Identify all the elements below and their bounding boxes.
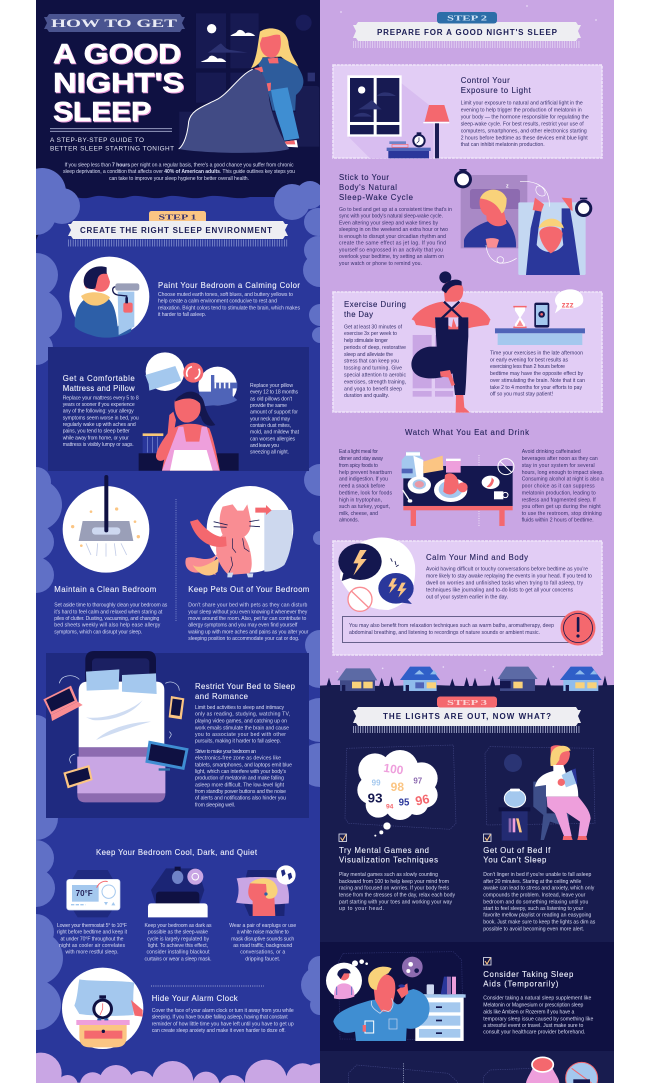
body: sleeping. If you have trouble falling asleep, having that constant xyxy=(152,1015,288,1021)
left body xyxy=(344,324,406,399)
skyline with houses xyxy=(320,666,614,691)
step 1 tag xyxy=(149,211,206,223)
right body: Avoid drinking caffeinated xyxy=(522,449,581,455)
title: Stick to Your xyxy=(339,173,389,182)
illustration: counting thought cloud: 99 xyxy=(372,779,381,788)
title xyxy=(339,846,438,864)
section: clean bedroom xyxy=(54,475,168,635)
step 2 heading: PREPARE FOR A GOOD NIGHT'S SLEEP xyxy=(377,28,558,37)
text: thermostat: Lower your thermostat 5° to 10°F xyxy=(57,923,127,929)
title xyxy=(195,682,296,701)
icon: checkbox xyxy=(484,834,491,842)
text: earplugs: dripping faucet. xyxy=(245,956,280,962)
body: Even altering your sleep and wake times by xyxy=(339,220,438,226)
body: Limit bed activities to sleep and intimacy xyxy=(195,705,284,711)
body: computers, smartphones, and other electronics starting xyxy=(461,128,587,134)
icon: mop xyxy=(63,475,149,573)
right body: bedtime may have the opposite effect by xyxy=(490,371,583,377)
left body: mattress is visibly lumpy or sags. xyxy=(63,442,134,448)
section: pets xyxy=(185,486,309,642)
intro text: If you sleep less than 7 hours per night on a regular basis, there's a good chance you suffer from chronic xyxy=(64,162,294,168)
body: Choose muted earth tones, soft blues, and buttery yellows to xyxy=(158,292,293,298)
body: bed sheets weekly will also help ease allergy xyxy=(54,623,161,629)
body xyxy=(152,1008,294,1034)
icon: red clock xyxy=(566,1062,598,1083)
callout box xyxy=(342,616,568,642)
hero illustration: woman pulling blanket xyxy=(179,13,319,153)
right body: you often get up during the night xyxy=(522,504,601,510)
body: it harder to fall asleep. xyxy=(158,312,206,318)
right body: contain dust mites, xyxy=(250,423,291,429)
main title: A GOOD xyxy=(53,38,181,69)
body: only as reading, studying, watching TV, xyxy=(195,712,290,718)
callout box: You may also benefit from relaxation techniques such as warm baths, aromatherapy, deep xyxy=(349,623,554,629)
body: electronics-free zone as devices like xyxy=(195,756,281,762)
body: help create a calm environment conducive to rest and xyxy=(158,299,277,305)
body: sleep-wake cycle. For best results, restrict your use of xyxy=(461,122,584,128)
left body: exercise 3x per week to xyxy=(344,331,397,337)
body: aids like Ambien or Rozerem if you have a xyxy=(483,1009,574,1015)
right body: to use the restroom, stop drinking xyxy=(522,511,602,517)
illustration: counting thought cloud: 100 xyxy=(383,761,405,777)
body: more likely to stay awake replaying the events in your head. If you tend to xyxy=(426,573,592,579)
panel: restrict your bed xyxy=(43,651,309,818)
illustration: window and lamp xyxy=(347,75,449,158)
right body: can worsen allergies xyxy=(250,436,295,442)
left body: high in tryptophan, xyxy=(339,497,382,503)
left body: years or sooner if you experience xyxy=(63,402,135,408)
step 1 heading: CREATE THE RIGHT SLEEP ENVIRONMENT xyxy=(80,226,272,235)
body xyxy=(54,603,168,635)
subtitle: A STEP-BY-STEP GUIDE TO xyxy=(50,137,144,144)
icon: thermostat: 70°F xyxy=(76,889,93,898)
body xyxy=(483,872,596,932)
left body: pains, you tend to sleep better xyxy=(63,429,130,435)
text: earplugs: mask disruptive sounds such xyxy=(231,936,294,942)
illustration: sleeper and waking xyxy=(454,169,592,275)
left body: such as turkey, yogurt, xyxy=(339,504,390,510)
left body: regularly wake up with aches and xyxy=(63,422,136,428)
body: up to your head. xyxy=(339,906,384,912)
icon: man painting xyxy=(69,257,149,338)
text: dark bedroom: consider installing blackout xyxy=(146,950,210,956)
right body: exercising less than 2 hours before xyxy=(490,364,565,370)
text: thermostat: right before bedtime and keep it xyxy=(57,930,128,936)
right column: lilac background xyxy=(320,0,614,690)
section: hide alarm clock xyxy=(62,968,294,1049)
illustration: counting thought cloud xyxy=(345,745,456,837)
body: is enough to disrupt your circadian rhythm and xyxy=(339,234,446,240)
step 3 heading: THE LIGHTS ARE OUT, NOW WHAT? xyxy=(383,712,551,721)
heading: Keep Your Bedroom Cool, Dark, and Quiet xyxy=(96,848,258,857)
right body: your neck and may xyxy=(250,416,290,422)
main title: SLEEP xyxy=(53,96,151,127)
callout box: abdominal breathing, and listening to recordings of nature sounds or ambient music. xyxy=(349,630,540,636)
body: symptoms, which can disrupt your sleep. xyxy=(54,629,142,635)
right body: stay in your system for several xyxy=(522,463,595,469)
illustration: food table xyxy=(402,452,514,527)
body: can create sleep anxiety and make it even harder to doze off. xyxy=(152,1028,286,1034)
body: move around the room. Also, pet fur can contribute to xyxy=(188,616,306,622)
right body: hours, long enough to impact sleep. xyxy=(522,470,604,476)
subtitle: BETTER SLEEP STARTING TONIGHT xyxy=(50,146,174,153)
text: dark bedroom: light. To achieve this effect, xyxy=(148,943,208,949)
right body: fluids within 2 hours of bedtime. xyxy=(522,518,594,524)
title xyxy=(344,300,406,319)
body xyxy=(195,705,292,808)
section: paint your bedroom xyxy=(69,257,300,338)
left body: special attention to aerobic xyxy=(344,372,406,378)
title: Keep Pets Out of Your Bedroom xyxy=(188,585,309,594)
body: Consider taking a natural sleep supplement like xyxy=(483,995,591,1001)
illustration: counting thought cloud: 93 xyxy=(368,791,382,806)
text: earplugs: Wear a pair of earplugs or use xyxy=(229,923,296,929)
body: your sleep without you even knowing it whenever they xyxy=(188,609,308,615)
body xyxy=(339,207,452,267)
title: and Romance xyxy=(195,692,248,701)
woman xyxy=(179,28,303,153)
body: work emails stimulate the brain and cause xyxy=(195,725,289,731)
title xyxy=(63,374,135,393)
body: favorite mellow playlist or reading an easygoing xyxy=(483,913,591,919)
right body: amount of support for xyxy=(250,410,298,416)
body: pursuits, making it harder to fall asleep. xyxy=(195,739,281,745)
body: racing and focused on worries. If your body feels xyxy=(339,886,449,892)
title: Visualization Techniques xyxy=(339,856,438,864)
body: Cover the face of your alarm clock or turn it away from you while xyxy=(152,1008,294,1014)
body xyxy=(483,995,593,1036)
body: your watch or phone to remind you. xyxy=(339,261,422,267)
left body: sleep and alleviate the xyxy=(344,352,393,358)
body: playing video games, and catching up on xyxy=(195,719,287,725)
left body: and indigestion. If you xyxy=(339,477,388,483)
body: after 20 minutes. Staring at the ceiling while xyxy=(483,879,581,885)
left body: and yoga to benefit sleep xyxy=(344,386,402,392)
body xyxy=(426,566,592,600)
body xyxy=(339,872,455,912)
title: Get Out of Bed If xyxy=(483,846,551,855)
text: dark bedroom: Keep your bedroom as dark as xyxy=(144,923,212,929)
icon: earplugs xyxy=(236,865,296,916)
left body: while away from home, or your xyxy=(63,435,129,441)
left body: dinner and stay away xyxy=(339,456,383,462)
body: Set aside time to thoroughly clean your bedroom as xyxy=(54,603,168,609)
step 2 tag: STEP 2 xyxy=(447,14,488,22)
body: waking up with more aches and pains as you alter your xyxy=(188,629,309,635)
text: dark bedroom xyxy=(144,923,212,962)
subtitle xyxy=(50,129,174,153)
step 2 heading xyxy=(353,12,581,44)
text: thermostat: with more restful sleep. xyxy=(66,950,118,956)
right body: sneezing all night. xyxy=(250,450,289,456)
blue house xyxy=(400,667,440,691)
illustration: counting thought cloud: 94 xyxy=(386,804,394,811)
right body: or early evening for best results as xyxy=(490,357,568,363)
title: Exercise During xyxy=(344,300,406,309)
intro text: sleep deprivation, a condition that affects over 40% of American adults. This guide outlines key steps you xyxy=(63,169,295,175)
body: reminder of how little time you have left until you have to get up xyxy=(152,1021,294,1027)
body: overlook your bedtime, try setting an alarm on xyxy=(339,254,444,260)
step 3 heading xyxy=(353,696,581,730)
step 3 tag xyxy=(437,696,497,708)
title: Maintain a Clean Bedroom xyxy=(54,585,156,594)
title: Calm Your Mind and Body xyxy=(426,553,528,562)
body: sleeping in on the weekend an extra hour or two xyxy=(339,227,448,233)
body: sync with your body's natural sleep-wake cycle. xyxy=(339,214,443,220)
panel: mattress and pillow xyxy=(48,347,309,471)
left body: duration and quality. xyxy=(344,393,389,399)
body: part starting with your toes and working your way xyxy=(339,899,452,905)
panel: calm your mind xyxy=(333,538,602,655)
body: out of your system earlier in the day. xyxy=(426,594,508,600)
title banner: how to get: HOW TO GET xyxy=(51,18,178,30)
left body: periods of deep, restorative xyxy=(344,345,406,351)
step 1 heading xyxy=(68,211,288,243)
blue house xyxy=(560,667,602,691)
body: of alerts and notifications also hinder you xyxy=(195,796,286,802)
title: the Day xyxy=(344,310,373,319)
right body: beverages after noon as they can xyxy=(522,456,598,462)
text: earplugs: a white noise machine to xyxy=(237,930,289,936)
title xyxy=(483,970,574,988)
body: relaxation. Bright colors tend to stimulate the brain, which makes xyxy=(158,305,300,311)
icon: cat at door xyxy=(185,486,293,577)
text: earplugs xyxy=(229,923,296,962)
right column: navy background xyxy=(320,688,614,1083)
body xyxy=(461,100,589,148)
body xyxy=(158,292,300,318)
title: Paint Your Bedroom a Calming Color xyxy=(158,281,300,290)
illustration: shelf, hourglass, phone xyxy=(413,289,585,397)
body: bedroom and do something relaxing until you xyxy=(483,899,588,905)
icon: checkbox xyxy=(339,834,346,842)
body: asleep more difficult. The low-level light xyxy=(195,782,285,788)
left body: help stimulate longer xyxy=(344,338,388,344)
section: stick to your cycle xyxy=(339,169,592,275)
panel: control your exposure xyxy=(333,65,602,158)
title: Mattress and Pillow xyxy=(63,384,135,393)
body: dwell on worries and unfinished tasks when trying to fall asleep, try xyxy=(426,580,583,586)
title: Aids (Temporarily) xyxy=(483,980,559,988)
body xyxy=(188,603,309,642)
left body: Get at least 30 minutes of xyxy=(344,324,403,330)
body: tense from the stresses of the day, relax each body xyxy=(339,892,455,898)
left body: stress that can keep you xyxy=(344,359,399,365)
body: allergy symptoms and you may even find yourself xyxy=(188,623,298,629)
icon: dark bedroom xyxy=(148,867,208,917)
body: you to associate your bed with other xyxy=(195,732,286,738)
right body: take 2 to 4 months for your efforts to pay xyxy=(490,385,582,391)
text: dark bedroom: cycle is largely regulated by xyxy=(147,936,209,942)
right body: as old pillows don't xyxy=(250,396,293,402)
left body xyxy=(63,395,139,448)
body: from standby power buttons and the noise xyxy=(195,789,286,795)
right body: and leave you xyxy=(250,443,279,449)
body: from sleeping well. xyxy=(195,802,235,808)
left body: from spicy foods to xyxy=(339,463,378,469)
right body xyxy=(490,350,585,398)
body: evening to help trigger the production of melatonin in xyxy=(461,108,582,114)
window xyxy=(196,13,259,103)
body: backward from 100 to help keep your mind from xyxy=(339,879,449,885)
right body: Time your exercises in the late afternoon xyxy=(490,350,583,356)
body: create the same effect as jet lag. If you find xyxy=(339,241,446,247)
right body: melatonin production, leading to xyxy=(522,490,596,496)
body: that can inhibit melatonin production. xyxy=(461,142,545,148)
sofa xyxy=(179,73,319,147)
text: thermostat: night as cooler air correlates xyxy=(59,943,125,949)
clouds: bottom of left column xyxy=(36,1052,320,1083)
title: Hide Your Alarm Clock xyxy=(152,994,238,1003)
body: temporary sleep issue caused by something like xyxy=(483,1016,593,1022)
illustration: woman reading on chair xyxy=(485,745,595,841)
left column background xyxy=(36,0,320,1083)
left body: Replace your mattress every 5 to 8 xyxy=(63,395,139,401)
body: 2 hours before bedtime as these devices emit blue light xyxy=(461,135,588,141)
body: Don't linger in bed if you're unable to fall asleep xyxy=(483,872,591,878)
step 3 tag: STEP 3 xyxy=(447,699,488,707)
body: piles of clutter. Dusting, vacuuming, and changing xyxy=(54,616,159,622)
title xyxy=(483,846,551,864)
illustration: counting thought cloud: 95 xyxy=(399,798,410,809)
illustration: man taking supplements xyxy=(326,952,466,1041)
right body: mold, and mildew that xyxy=(250,430,300,436)
body: Don't share your bed with pets as they can disturb xyxy=(188,603,307,609)
body: production of melatonin and make falling xyxy=(195,776,284,782)
step 1 tag: STEP 1 xyxy=(158,214,197,222)
body: Strive to make your bedroom an xyxy=(195,749,256,755)
main title: NIGHT'S xyxy=(53,67,184,98)
illustration: woman in tree pose xyxy=(439,271,463,302)
title: Consider Taking Sleep xyxy=(483,970,574,979)
title: Sleep-Wake Cycle xyxy=(339,193,413,202)
illustration: bed with devices xyxy=(43,651,189,802)
right body: off so you must stay patient! xyxy=(490,392,553,398)
text: thermostat: at under 70°F throughout the xyxy=(60,936,124,942)
left body: need a snack before xyxy=(339,484,385,490)
illustration: sleeper and waking: z xyxy=(506,184,509,190)
title: Body's Natural xyxy=(339,183,397,192)
panel: exercise during the day xyxy=(333,271,602,413)
section: cool dark quiet xyxy=(57,848,296,962)
left body: almonds. xyxy=(339,518,359,524)
body: Go to bed and get up at a consistent time that's in xyxy=(339,207,452,213)
icon: checkbox xyxy=(484,958,491,965)
clock xyxy=(296,15,312,31)
body: compounds the problem. Instead, leave your xyxy=(483,892,586,898)
text: dark bedroom: possible as the sleep-wake xyxy=(148,930,208,936)
body: awake can lead to stress and anxiety, which only xyxy=(483,886,595,892)
illustration: counting thought cloud: 96 xyxy=(414,792,431,809)
gray house xyxy=(337,668,377,691)
bottom row: cropped frames and icons xyxy=(348,1057,598,1083)
section: watch what you eat xyxy=(339,428,604,527)
body: techniques like journaling and to-do lists to get all your concerns xyxy=(426,587,573,593)
icon: exclamation xyxy=(560,610,596,646)
right body xyxy=(250,383,300,456)
body: yourself so engrossed in an activity that you xyxy=(339,247,443,253)
text: thermostat xyxy=(57,923,128,956)
text: earplugs: as road traffic, background xyxy=(233,943,292,949)
left body: exercises, strength training, xyxy=(344,379,406,385)
right body: poor choice as it can suppress xyxy=(522,484,595,490)
left body: milk, cheese, and xyxy=(339,511,378,517)
title: You Can't Sleep xyxy=(483,856,547,864)
title: Control Your xyxy=(461,76,510,85)
illustration: counting thought cloud: 98 xyxy=(391,780,404,794)
left body xyxy=(339,449,392,524)
right body: over stimulating the brain. Note that it can xyxy=(490,378,585,384)
body: Avoid having difficult or touchy conversations before bedtime as you're xyxy=(426,566,588,572)
body: Melatonin or Magnesium or prescription sleep xyxy=(483,1002,583,1008)
title xyxy=(339,173,413,202)
right body: restless and fragmented sleep. If xyxy=(522,497,596,503)
body: possible to avoid becoming even more alert. xyxy=(483,926,584,932)
heading: Watch What You Eat and Drink xyxy=(405,428,529,437)
intro text: can take to improve your sleep hygiene for better overall health. xyxy=(109,176,249,182)
icon: alarm clock on nightstand xyxy=(62,968,143,1049)
right body: Consuming alcohol at night is also a xyxy=(522,477,604,483)
body: Limit your exposure to natural and artificial light in the xyxy=(461,100,583,106)
title xyxy=(461,76,532,95)
body: it's hard to feel calm and relaxed when staring at xyxy=(54,609,163,615)
title banner: how to get xyxy=(44,14,185,32)
left body: bedtime, look for foods xyxy=(339,490,392,496)
title: Get a Comfortable xyxy=(63,374,135,383)
body: consult your healthcare provider beforehand. xyxy=(483,1030,585,1036)
left body: any of the following: your allergy xyxy=(63,409,134,415)
section: mental games xyxy=(339,745,456,912)
body: book. Just make sure to keep the lights as dim as xyxy=(483,920,596,926)
panel: sleep aids xyxy=(320,942,614,1051)
body: light, which can interfere with your body's xyxy=(195,769,286,775)
title: Try Mental Games and xyxy=(339,846,429,855)
intro text xyxy=(63,162,295,182)
main title xyxy=(53,38,184,127)
section: get out of bed xyxy=(483,745,596,932)
left body: Eat a light meal for xyxy=(339,449,378,455)
body: sleeping position to accommodate your cat or dog. xyxy=(188,636,299,642)
text: earplugs: conversations, or a xyxy=(240,950,285,956)
body: Play mental games such as slowly counting xyxy=(339,872,438,878)
title: Exposure to Light xyxy=(461,86,532,95)
left body: help prevent heartburn xyxy=(339,470,392,476)
icon: lamp xyxy=(526,1057,559,1083)
step 2 tag xyxy=(437,12,497,24)
illustration: speech bubbles xyxy=(338,538,415,611)
right body: every 12 to 18 months xyxy=(250,390,298,396)
right body: provide the same xyxy=(250,403,287,409)
right body xyxy=(522,449,604,524)
right body: Replace your pillow xyxy=(250,383,293,389)
icon: thermostat xyxy=(67,870,120,917)
left body: tossing and turning. Give xyxy=(344,365,402,371)
body: tablets, smartphones, and laptops emit blue xyxy=(195,762,292,768)
illustration: counting thought cloud: 97 xyxy=(413,777,423,786)
illustration: shelf, hourglass, phone: zzz xyxy=(562,300,574,309)
body: a stressful event or travel. Just make sure to xyxy=(483,1023,583,1029)
gray house xyxy=(498,667,538,691)
body: start to feel sleepy, such as listening to your xyxy=(483,906,584,912)
illustration: woman thinking xyxy=(139,352,239,471)
body: your body — the hormone responsible for regulating the xyxy=(461,114,589,120)
title: Restrict Your Bed to Sleep xyxy=(195,682,296,691)
text: dark bedroom: curtains or wear a sleep mask. xyxy=(144,956,212,962)
left body: symptoms seem worse in bed, you xyxy=(63,415,139,421)
